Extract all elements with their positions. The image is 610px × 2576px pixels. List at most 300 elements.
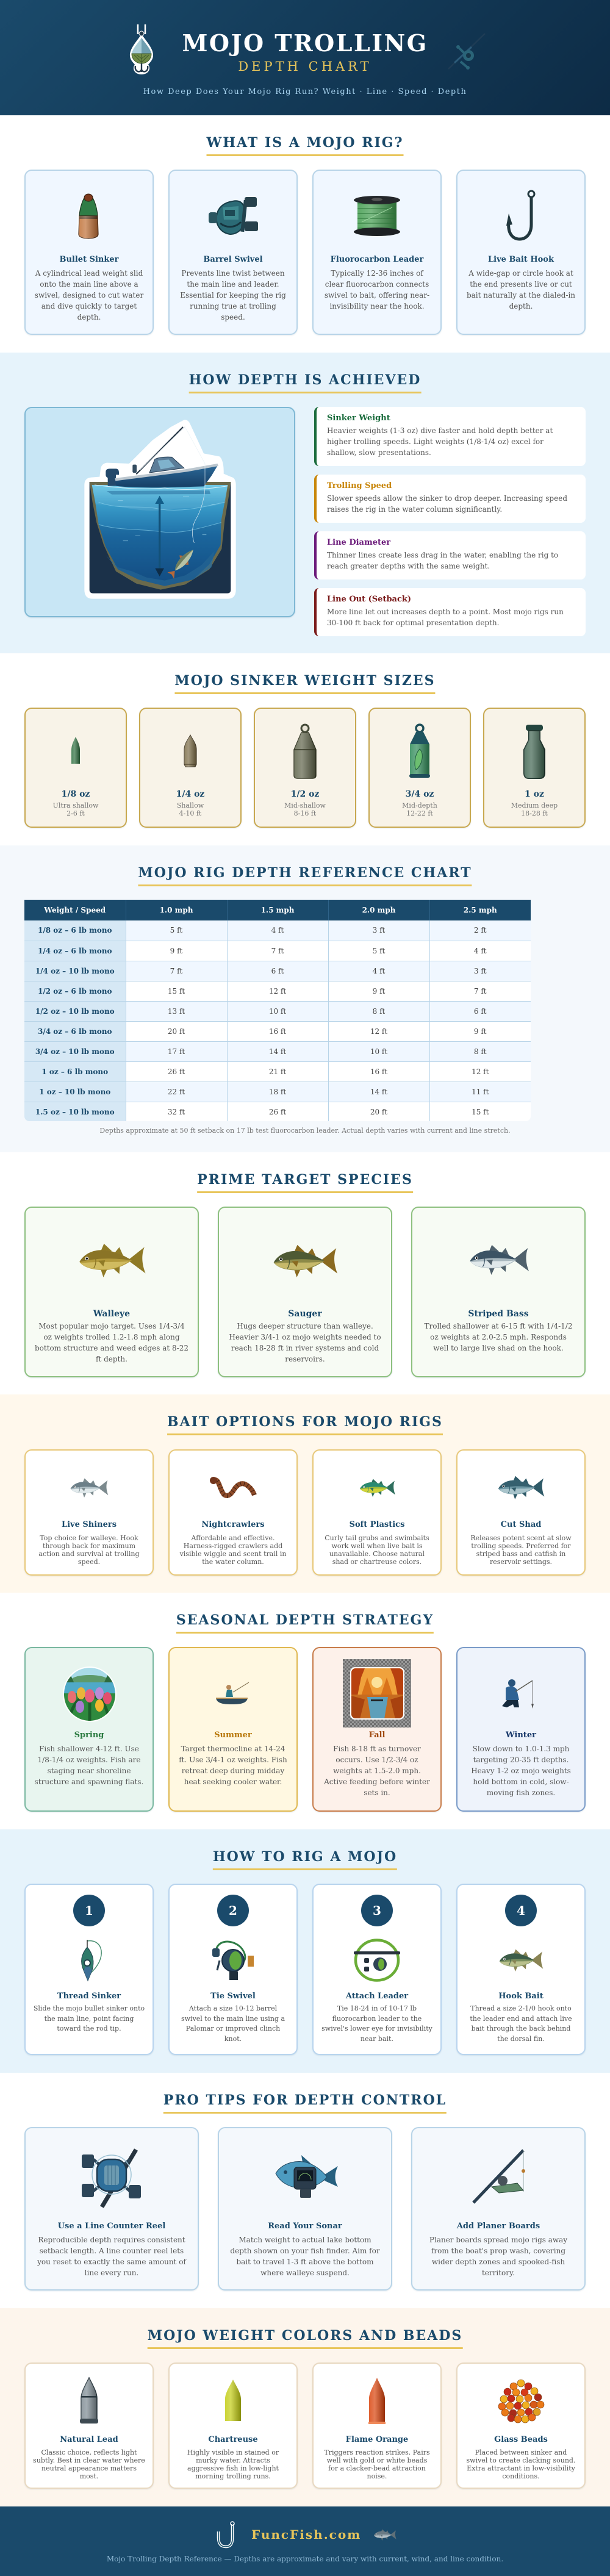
heading: HOW DEPTH IS ACHIEVED [189, 372, 421, 388]
factor text: reach greater depths with the same weight. [327, 562, 490, 570]
depth reference table: 3 ft [373, 926, 385, 935]
title: Flame Orange [346, 2435, 408, 2444]
description [170, 2004, 296, 2044]
depth reference table: 5 ft [170, 926, 182, 935]
section: sinker weight sizes [0, 653, 610, 845]
description: Triggers reaction strikes. Pairs [324, 2449, 430, 2456]
description: trolling speeds. Preferred for [471, 1542, 571, 1549]
description [219, 2234, 391, 2278]
description: depth. [509, 302, 533, 310]
description: Trolled shallower at 6-15 ft with 1/4-1/2 [425, 1322, 572, 1330]
depth reference table: 2.0 mph [362, 906, 395, 914]
description: and dive quickly to target [41, 302, 137, 310]
depth reference table: 26 ft [269, 1108, 286, 1116]
icon: sauger fish [273, 1244, 337, 1277]
icon: fish hook [506, 190, 536, 240]
description: aggressive fish in low-light [187, 2464, 279, 2472]
depth range: Mid-shallow [284, 802, 326, 809]
heading: HOW TO RIG A MOJO [213, 1849, 397, 1865]
icon: footer hook logo [216, 2520, 237, 2549]
description: Typically 12-36 inches of [331, 269, 423, 278]
card: fall [312, 1647, 442, 1812]
section: prime target species [0, 1152, 610, 1394]
section: pro tips [0, 2073, 610, 2308]
icon: 3/4 oz sinker [409, 723, 430, 778]
description: well with gold or white beads [327, 2456, 427, 2464]
factor title: Sinker Weight [327, 414, 390, 423]
depth reference table: 26 ft [168, 1067, 185, 1076]
description [425, 1322, 572, 1352]
icon: 1/4 oz sinker [184, 734, 196, 767]
description [35, 269, 144, 321]
depth reference table: 32 ft [168, 1108, 185, 1116]
depth reference table: 1/2 oz – 10 lb mono [35, 1006, 115, 1015]
description: for a clacker-bead attraction [328, 2464, 426, 2472]
heading: BAIT OPTIONS FOR MOJO RIGS [167, 1414, 443, 1430]
card: planer boards [411, 2127, 586, 2291]
icon: bullet sinker [77, 193, 99, 240]
depth reference table: 14 ft [370, 1087, 387, 1096]
depth range [53, 802, 99, 817]
description [35, 1322, 188, 1363]
factor: line diameter [314, 531, 586, 579]
description: Extra attractant in low-visibility [467, 2464, 575, 2472]
brand name: FuncFish.com [251, 2527, 361, 2542]
icon: glass bead cluster [498, 2379, 544, 2424]
factor text [327, 426, 553, 457]
icon: lead sinker [80, 2378, 98, 2424]
step number: 4 [517, 1903, 525, 1918]
weight label: 1/4 oz [176, 789, 204, 799]
depth reference table: 7 ft [170, 966, 182, 975]
description: territory. [482, 2269, 515, 2277]
description: swivel, designed to cut water [35, 291, 143, 300]
heading: SEASONAL DEPTH STRATEGY [176, 1612, 434, 1628]
description: Slide the mojo bullet sinker onto [34, 2004, 145, 2012]
factor: sinker weight [314, 407, 586, 466]
description: Active feeding before winter [324, 1778, 430, 1786]
section: what is a mojo rig [0, 115, 610, 353]
factor title: Trolling Speed [327, 481, 392, 490]
title: Soft Plastics [350, 1520, 404, 1529]
icon: flame orange sinker [368, 2378, 386, 2425]
description: ft depth. [96, 1355, 127, 1363]
section: bait options [0, 1394, 610, 1593]
description: Palomar or improved clinch [186, 2025, 280, 2032]
depth reference table: 13 ft [168, 1006, 185, 1015]
description: shad or chartreuse colors. [332, 1558, 422, 1565]
depth reference table: 8 ft [474, 1047, 487, 1055]
title: Glass Beads [494, 2435, 548, 2444]
description [26, 2234, 198, 2278]
title: Nightcrawlers [201, 1520, 265, 1529]
step number: 1 [85, 1903, 93, 1918]
description [38, 1534, 139, 1565]
depth reference table: 20 ft [370, 1108, 387, 1116]
description [314, 2004, 440, 2044]
card: bullet sinker [24, 170, 154, 335]
depth reference table: 9 ft [170, 947, 182, 955]
description: Fish shallower 4-12 ft. Use [39, 1745, 139, 1753]
description: the main line, point facing [45, 2015, 134, 2023]
description: the dorsal fin. [497, 2035, 545, 2043]
description [26, 2449, 152, 2480]
icon: 1/8 oz sinker [71, 737, 80, 764]
icon: spinning reel with swivel [211, 1940, 255, 1981]
description: oz weights at 2.0-2.5 mph. Responds [430, 1333, 567, 1341]
depth reference table: 10 ft [370, 1047, 387, 1055]
card: read your sonar [218, 2127, 392, 2291]
card: glass beads [456, 2363, 586, 2489]
description: oz weights trolled 1.2-1.8 mph along [43, 1333, 180, 1341]
description: depth. [77, 313, 101, 321]
footer [0, 2506, 610, 2576]
description: Prevents line twist between [181, 269, 285, 278]
description: Planer boards spread mojo rigs away [429, 2236, 567, 2244]
card: winter [456, 1647, 586, 1812]
description: line every run. [85, 2269, 138, 2277]
description: Releases potent scent at slow [470, 1534, 572, 1542]
header banner [0, 0, 610, 115]
description: reservoir settings. [490, 1558, 552, 1565]
card: natural lead [24, 2363, 154, 2489]
icon: 1/2 oz sinker [293, 723, 317, 779]
factor text: Slower speeds allow the sinker to drop deeper. Increasing speed [327, 494, 567, 503]
icon: chartreuse sinker [224, 2380, 242, 2422]
title: Bullet Sinker [59, 255, 119, 264]
description: Tie 18-24 in of 10-17 lb [337, 2004, 417, 2012]
icon: angler in small boat [216, 1682, 249, 1705]
description: murky water. Attracts [196, 2456, 270, 2464]
description: moving fish zones. [487, 1788, 555, 1797]
section: how to rig a mojo [0, 1829, 610, 2073]
card: barrel swivel [168, 170, 298, 335]
depth reference table: 15 ft [472, 1108, 489, 1116]
description: staging near shoreline [48, 1767, 131, 1775]
factor title: Line Out (Setback) [327, 595, 411, 604]
panel: depth diagram [24, 407, 295, 617]
icon: soft plastic swimbait [360, 1479, 395, 1497]
description: Slow down to 1.0-1.3 mph [473, 1745, 569, 1753]
description: weights at 1.5-2.0 mph. [333, 1767, 421, 1775]
icon: ice fisherman [501, 1677, 537, 1710]
icon: nightcrawler worm [210, 1477, 257, 1498]
depth reference table: 16 ft [370, 1067, 387, 1076]
depth reference table: 12 ft [269, 987, 286, 996]
section: how depth is achieved [0, 353, 610, 653]
depth reference table: 15 ft [168, 987, 185, 996]
icon: threaded sinker [80, 1940, 107, 1981]
icon: walleye fish [79, 1243, 145, 1277]
title: MOJO TROLLING [182, 29, 428, 57]
depth reference table: 7 ft [474, 987, 487, 996]
factor text [327, 494, 567, 514]
depth range [284, 802, 326, 817]
tagline: How Deep Does Your Mojo Rig Run? Weight · Line · Speed · Depth [143, 87, 467, 96]
description: subtly. Best in clear water where [33, 2456, 145, 2464]
depth reference table: 8 ft [373, 1006, 385, 1015]
description: Curly tail grubs and swimbaits [325, 1534, 429, 1542]
depth range [177, 802, 204, 817]
icon: shad [498, 1476, 544, 1499]
season name: Summer [214, 1731, 252, 1740]
depth range: 8-16 ft [294, 809, 316, 817]
title: Attach Leader [346, 1992, 408, 2001]
description: where walleye suspend. [260, 2269, 350, 2277]
step 3 card [312, 1884, 442, 2055]
description: Hugs deeper structure than walleye. [237, 1322, 373, 1330]
depth reference table: 17 ft [168, 1047, 185, 1055]
description: Affordable and effective. [192, 1534, 274, 1542]
depth reference table: 2.5 mph [464, 906, 497, 914]
step 2 card [168, 1884, 298, 2055]
step number [217, 1895, 249, 1926]
card: 3/4 oz [368, 708, 471, 828]
illustration: boat trolling over lake cross-section [84, 420, 236, 599]
factor text: Heavier weights (1-3 oz) dive faster and hold depth better at [327, 426, 553, 435]
card: 1/4 oz [139, 708, 242, 828]
depth range: 12-22 ft [406, 809, 433, 817]
depth reference table: 21 ft [269, 1067, 286, 1076]
depth range: Medium deep [511, 802, 558, 809]
factor text: 30-100 ft back for optimal presentation depth. [327, 619, 499, 627]
heading: WHAT IS A MOJO RIG? [207, 135, 403, 151]
depth reference table: 10 ft [269, 1006, 286, 1015]
depth reference table: 2 ft [474, 926, 487, 935]
factor text: raises the rig in the water column significantly. [327, 505, 502, 514]
description: the end presents live or cut [470, 280, 572, 289]
icon: rod and planer board [472, 2149, 525, 2204]
depth reference table: 4 ft [373, 966, 385, 975]
depth range: Shallow [177, 802, 204, 809]
season name: Winter [506, 1731, 536, 1740]
depth range: 4-10 ft [179, 809, 201, 817]
description: reservoirs. [285, 1355, 325, 1363]
factor text [327, 608, 564, 627]
description: Most popular mojo target. Uses 1/4-3/4 [38, 1322, 185, 1330]
description: bait to travel 1-3 ft above the bottom [236, 2258, 373, 2266]
weight label: 3/4 oz [406, 789, 434, 799]
depth range: 2-6 ft [66, 809, 85, 817]
card: live shiners [24, 1449, 154, 1576]
description: A wide-gap or circle hook at [468, 269, 573, 278]
description [458, 2004, 584, 2044]
icon: striped bass fish [470, 1245, 529, 1275]
depth reference table: 16 ft [269, 1027, 286, 1036]
factor title: Line Diameter [327, 538, 390, 547]
factor text: More line let out increases depth to a point. Most mojo rigs run [327, 608, 564, 616]
icon: line spool [354, 196, 400, 236]
description: Placed between sinker and [475, 2449, 567, 2456]
depth reference table: 6 ft [474, 1006, 487, 1015]
depth reference table: 1/2 oz – 6 lb mono [38, 987, 112, 996]
description: structure and spawning flats. [35, 1778, 143, 1786]
description [458, 1743, 584, 1798]
title: Use a Line Counter Reel [58, 2222, 165, 2231]
table footnote: Depths approximate at 50 ft setback on 17 lb test fluorocarbon leader. Actual depth varies with current and line stretch. [99, 1127, 511, 1135]
heading: PRIME TARGET SPECIES [197, 1172, 413, 1188]
depth reference table: 1/4 oz – 6 lb mono [38, 947, 112, 955]
title: Live Bait Hook [488, 255, 554, 264]
icon: leader coil and rod [353, 1939, 401, 1982]
title: Barrel Swivel [203, 255, 263, 264]
weight label: 1/2 oz [291, 789, 319, 799]
description: Top choice for walleye. Hook [40, 1534, 138, 1542]
description: setback length. A line counter reel lets [40, 2247, 184, 2255]
icon: baitcast reel [209, 197, 258, 235]
card: 1 oz [483, 708, 586, 828]
description: morning trolling runs. [195, 2472, 271, 2480]
card: 1/2 oz [254, 708, 356, 828]
title: Read Your Sonar [268, 2222, 342, 2231]
description: onto the main line above a [40, 280, 138, 289]
description: A cylindrical lead weight slid [35, 269, 143, 278]
description [325, 1534, 429, 1565]
description: hold bottom in cold, slow- [473, 1778, 569, 1786]
description: knot. [224, 2035, 242, 2043]
icon: fish with sonar display [274, 2155, 338, 2199]
description: bait naturally at the dialed-in [467, 291, 575, 300]
heading: MOJO WEIGHT COLORS AND BEADS [148, 2328, 462, 2344]
title: Tie Swivel [210, 1992, 256, 2001]
depth reference table: 22 ft [168, 1087, 185, 1096]
depth reference table: 3/4 oz – 6 lb mono [38, 1027, 112, 1036]
card: 1/8 oz [24, 708, 127, 828]
depth reference table: 11 ft [472, 1087, 489, 1096]
description: well to large live shad on the hook. [433, 1344, 564, 1352]
description [26, 2004, 152, 2034]
section: depth reference chart [0, 845, 610, 1152]
depth reference table: 1 oz – 6 lb mono [41, 1067, 108, 1076]
depth reference table: Weight / Speed [44, 906, 106, 914]
description: speed. [221, 313, 245, 321]
title: Fluorocarbon Leader [331, 255, 423, 264]
subtitle: depth chart: DEPTH CHART [238, 59, 372, 74]
title: Walleye [93, 1309, 130, 1319]
description: Highly visible in stained or [187, 2449, 279, 2456]
step 1 card [24, 1884, 154, 2055]
description: Attach a size 10-12 barrel [189, 2004, 277, 2012]
description [170, 2449, 296, 2480]
description: Fish 8-18 ft as turnover [333, 1745, 421, 1753]
description: the main line and leader. [187, 280, 279, 289]
description: Harness-rigged crawlers add [184, 1542, 282, 1549]
title: Striped Bass [468, 1309, 529, 1319]
description [314, 1743, 440, 1798]
description: work well when live bait is [332, 1542, 422, 1549]
description: Classic choice, reflects light [41, 2449, 137, 2456]
depth reference table: 1/4 oz – 10 lb mono [35, 966, 115, 975]
heading: PRO TIPS FOR DEPTH CONTROL [163, 2092, 447, 2108]
description: striped bass and catfish in [476, 1549, 565, 1558]
title: Sauger [288, 1309, 322, 1319]
description [467, 269, 575, 310]
description [229, 1322, 381, 1363]
depth reference table: 18 ft [269, 1087, 286, 1096]
section: seasonal depth strategy [24, 1614, 586, 1813]
description: fluorocarbon leader to the [332, 2015, 422, 2023]
description: toward the rod tip. [57, 2025, 121, 2032]
depth range [402, 802, 437, 817]
description [180, 269, 286, 321]
description: targeting 20-35 ft depths. [473, 1756, 569, 1764]
step 4 card [456, 1884, 586, 2055]
heading: MOJO RIG DEPTH REFERENCE CHART [138, 865, 472, 881]
season name: Fall [369, 1731, 385, 1740]
title: Thread Sinker [57, 1992, 121, 2001]
icon: rod and reel [448, 33, 486, 70]
depth reference table [24, 900, 531, 1121]
depth reference table: 9 ft [474, 1027, 487, 1036]
description: swivel to bait, offering near- [325, 291, 429, 300]
season name: Spring [74, 1731, 104, 1740]
depth reference table: 3/4 oz – 10 lb mono [35, 1047, 115, 1055]
card: cut shad [456, 1449, 586, 1576]
title: Cut Shad [501, 1520, 541, 1529]
depth reference table: 4 ft [271, 926, 284, 935]
depth reference table: 1.5 mph [261, 906, 294, 914]
weight label: 1/8 oz [62, 789, 90, 799]
depth reference table: 14 ft [269, 1047, 286, 1055]
description: wider depth zones and spooked-fish [432, 2258, 565, 2266]
description [325, 269, 429, 310]
description: reach 18-28 ft in river systems and cold [231, 1344, 379, 1352]
description: clear fluorocarbon connects [325, 280, 429, 289]
factor text: shallow, slow presentations. [327, 448, 431, 457]
description [458, 2449, 584, 2480]
description: sets in. [364, 1788, 390, 1797]
depth range [511, 802, 558, 817]
title: Natural Lead [60, 2435, 118, 2444]
card: walleye [24, 1207, 199, 1377]
description: bottom structure and weed edges at 8-22 [35, 1344, 188, 1352]
icon: baited fish [497, 1949, 545, 1971]
depth reference table: 1/8 oz – 6 lb mono [38, 926, 112, 935]
description: swivel's lower eye for invisibility [321, 2025, 432, 2032]
icon: mojo sinker with hook [129, 24, 153, 74]
description: 1/8-1/4 oz weights. Fish are [38, 1756, 140, 1764]
description: swivel to the main line using a [181, 2015, 285, 2023]
description: conditions. [502, 2472, 540, 2480]
depth range: Mid-depth [402, 802, 437, 809]
depth reference table: 9 ft [373, 987, 385, 996]
description [314, 2449, 440, 2480]
description: Match weight to actual lake bottom [239, 2236, 371, 2244]
description [179, 1534, 287, 1565]
depth range: Ultra shallow [53, 802, 98, 809]
icon: footer fish [373, 2529, 396, 2541]
depth reference table: 7 ft [271, 947, 284, 955]
depth reference table: 1.5 oz – 10 lb mono [35, 1108, 115, 1116]
description: speed. [78, 1558, 100, 1565]
depth range: 18-28 ft [521, 809, 548, 817]
description: Target thermocline at 14-24 [181, 1745, 285, 1753]
weight label: 1 oz [525, 789, 544, 799]
description: heat seeking cooler water. [184, 1778, 282, 1786]
card: nightcrawlers [168, 1449, 298, 1576]
card: sauger [218, 1207, 392, 1377]
description: noise. [367, 2472, 387, 2480]
section: weight colors and beads [0, 2308, 610, 2506]
card: summer [168, 1647, 298, 1812]
description: visible wiggle and scent trail in [180, 1549, 286, 1558]
factor text: Thinner lines create less drag in the water, enabling the rig to [327, 551, 558, 559]
description [412, 2234, 584, 2278]
description: action and survival at trolling [38, 1549, 139, 1558]
description: Reproducible depth requires consistent [38, 2236, 185, 2244]
factor: line out [314, 588, 586, 636]
icon: line counter reel [81, 2147, 142, 2208]
